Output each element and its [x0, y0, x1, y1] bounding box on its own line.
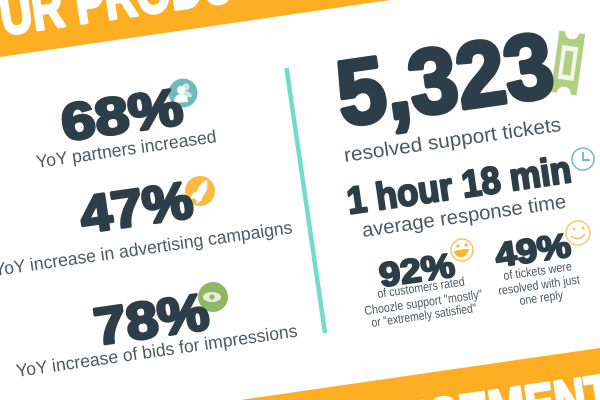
value: 68%: [57, 78, 186, 153]
caption: [497, 259, 581, 308]
top banner: [0, 0, 390, 57]
divider line: [286, 68, 325, 333]
caption: Choozle support "mostly": [363, 287, 483, 318]
value: 1 hour 18 min: [344, 149, 574, 223]
value: 78%: [90, 283, 213, 357]
icon: clock: [572, 148, 594, 170]
icon: partners: [168, 78, 198, 108]
caption: of customers rated: [376, 275, 466, 301]
value: 92%: [377, 246, 457, 295]
stat: 49% one reply: [493, 221, 590, 308]
icon: laughing smiley: [451, 239, 473, 261]
icon: eye: [198, 282, 228, 312]
stat: 92% satisfied: [363, 239, 483, 330]
icon: rocket: [185, 176, 215, 206]
stat: 5,323 tickets: [330, 14, 585, 167]
caption: [363, 275, 483, 330]
caption: YoY partners increased: [35, 126, 218, 172]
stat: response time: [344, 148, 594, 242]
value: 5,323: [330, 14, 560, 146]
caption: or "extremely satisfied": [370, 301, 477, 330]
caption: of tickets were: [502, 259, 573, 283]
caption: resolved support tickets: [343, 114, 562, 167]
caption: YoY increase in advertising campaigns: [0, 217, 293, 280]
value: 47%: [76, 171, 197, 245]
caption: resolved with just: [497, 272, 581, 298]
stat: 78% impressions: [15, 282, 299, 381]
caption: one reply: [518, 288, 565, 308]
icon: ticket: [551, 30, 585, 96]
stat: 47% campaigns: [0, 171, 293, 280]
icon: smiley: [566, 221, 590, 245]
caption: YoY increase of bids for impressions: [15, 321, 299, 381]
stat: 68% partners: [35, 78, 218, 172]
caption: average response time: [361, 191, 568, 242]
value: 49%: [493, 226, 573, 275]
